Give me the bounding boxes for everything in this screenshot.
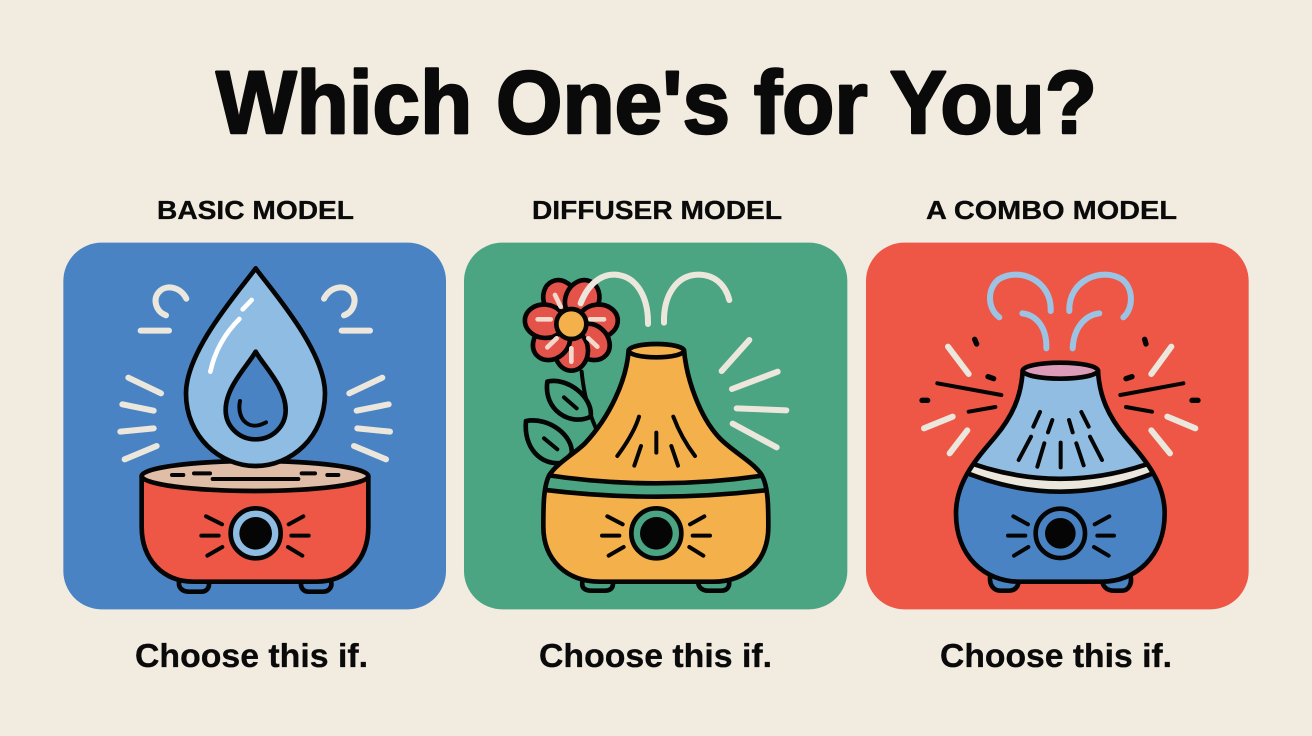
caption: combo model: Choose this if.	[940, 637, 1172, 674]
icon: steam and motion lines	[120, 287, 390, 459]
icon: diffuser body	[540, 344, 773, 591]
icon: water drop	[186, 268, 325, 466]
panel: diffuser model	[464, 243, 847, 609]
icon: humidifier base	[142, 461, 368, 592]
heading: combo model: A COMBO MODEL	[926, 195, 1177, 225]
icon: flower with leaves	[523, 275, 619, 463]
panel: combo model	[866, 243, 1249, 609]
heading: basic model: BASIC MODEL	[157, 195, 354, 225]
title: Which One's for You?	[216, 52, 1097, 152]
icon: motion lines	[922, 339, 1198, 453]
icon: combo humidifier body	[952, 363, 1169, 591]
icon: steam and motion lines	[581, 275, 786, 447]
caption: diffuser model: Choose this if.	[539, 637, 772, 674]
heading: diffuser model: DIFFUSER MODEL	[532, 195, 782, 225]
panel: basic model	[63, 243, 446, 609]
icon: mist curls	[990, 275, 1131, 348]
caption: basic model: Choose this if.	[135, 637, 368, 674]
